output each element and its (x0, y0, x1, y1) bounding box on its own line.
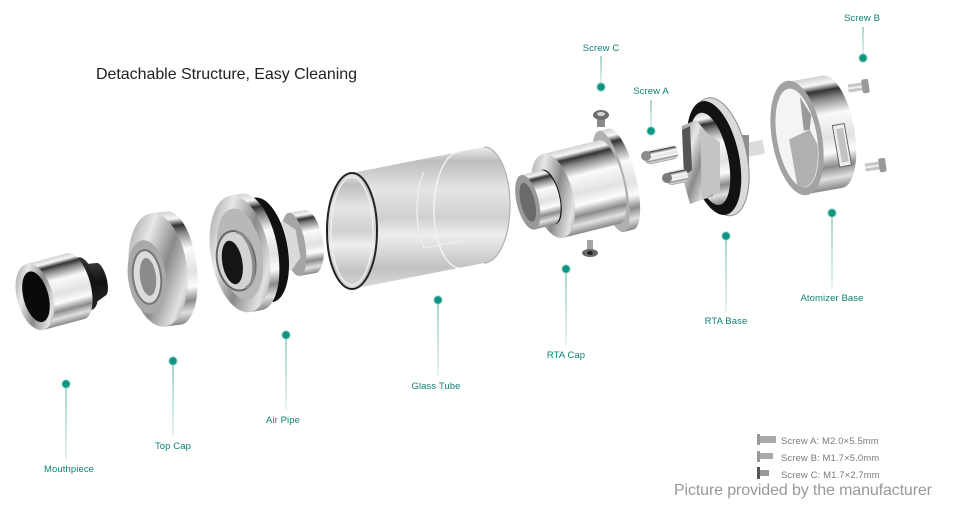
callout: Air Pipe: Air Pipe (266, 415, 300, 426)
part: glass tube (327, 147, 510, 289)
watermark: Picture provided by the manufacturer (674, 482, 933, 499)
title: Detachable Structure, Easy Cleaning (96, 66, 357, 83)
callout: RTA Cap (547, 265, 585, 361)
callout: Screw A (633, 86, 669, 135)
callout: Atomizer Base: Atomizer Base (800, 293, 864, 304)
callout: Mouthpiece: Mouthpiece (44, 464, 94, 475)
callout: Atomizer Base (800, 209, 864, 304)
callout: Screw B: Screw B (844, 13, 880, 24)
callout: Air Pipe (266, 331, 300, 426)
callout: Screw C: Screw C (583, 43, 619, 54)
part: RTA cap (505, 125, 648, 255)
legend row: Screw A: Screw A: M2.0×5.5mm (781, 436, 879, 447)
callout: Top Cap: Top Cap (155, 441, 191, 452)
part: Screw C (593, 110, 609, 127)
part: lower screw (582, 240, 598, 257)
callout: RTA Base: RTA Base (705, 316, 747, 327)
callout: Screw B (844, 13, 880, 62)
callout: Mouthpiece (44, 380, 94, 475)
part: atomizer base (762, 71, 864, 199)
part: top cap (122, 209, 204, 330)
callout: Glass Tube (411, 296, 461, 392)
legend row: Screw C: Screw C: M1.7×2.7mm (781, 470, 880, 481)
callout: RTA Cap: RTA Cap (547, 350, 585, 361)
callout: Screw C (583, 43, 619, 91)
legend row: Screw B: Screw B: M1.7×5.0mm (781, 453, 879, 464)
part: Screw B lower (864, 158, 887, 174)
part: air pipe (201, 188, 328, 317)
legend: screw sizes (757, 434, 880, 481)
part: RTA base (641, 92, 765, 222)
callout: RTA Base (705, 232, 747, 327)
callout: Screw A: Screw A (633, 86, 669, 97)
callout: Top Cap (155, 357, 191, 452)
part: mouthpiece (9, 245, 115, 335)
callout: Glass Tube: Glass Tube (411, 381, 461, 392)
part: Screw B upper (847, 79, 870, 95)
